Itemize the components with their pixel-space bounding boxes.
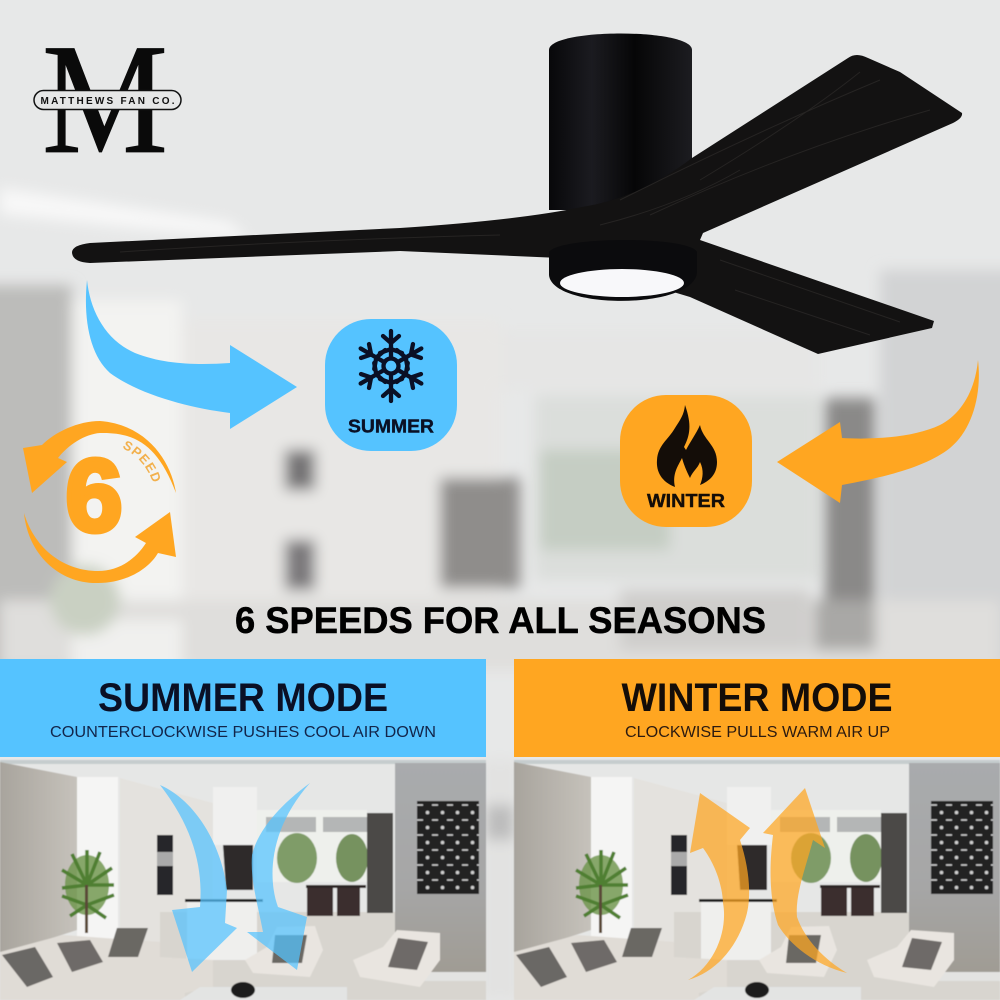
summer description: COUNTERCLOCKWISE PUSHES COOL AIR DOWN [50,724,436,741]
summer label: SUMMER [348,416,434,436]
summer arrow [86,280,297,429]
top circular arrow [23,421,176,493]
winter badge [620,395,752,527]
bottom circular arrow [24,512,176,583]
fan blades [72,55,962,354]
panel: winter mode [514,659,1000,757]
headline: 6 SPEEDS FOR ALL SEASONS [235,599,766,641]
winter arrow [777,360,979,503]
summer heading: SUMMER MODE [98,676,388,720]
logo: Matthews Fan Co.: MATTHEWS FAN CO. [40,96,175,107]
winter airflow arrows [688,788,847,980]
fan motor cylinder [549,34,692,210]
winter label: WINTER [647,490,725,511]
6 speed icon: SPEED [123,441,160,482]
ceiling fan [72,34,962,354]
logo: Matthews Fan Co.: M [42,12,168,187]
winter room photo [514,760,1000,1000]
speed label [122,448,155,492]
light housing [549,240,697,301]
winter heading: WINTER MODE [622,676,892,720]
icon: snowflake [355,331,427,401]
6 speed icon [23,421,176,583]
numeral 6: 6 [65,438,123,553]
panel: summer mode [0,659,486,757]
light lens [560,269,684,297]
summer room photo [0,760,486,1000]
summer airflow arrows [160,783,310,972]
winter description: CLOCKWISE PULLS WARM AIR UP [625,724,890,741]
blade wood grain [120,72,930,335]
icon: flame [657,405,717,487]
summer badge [325,319,457,451]
